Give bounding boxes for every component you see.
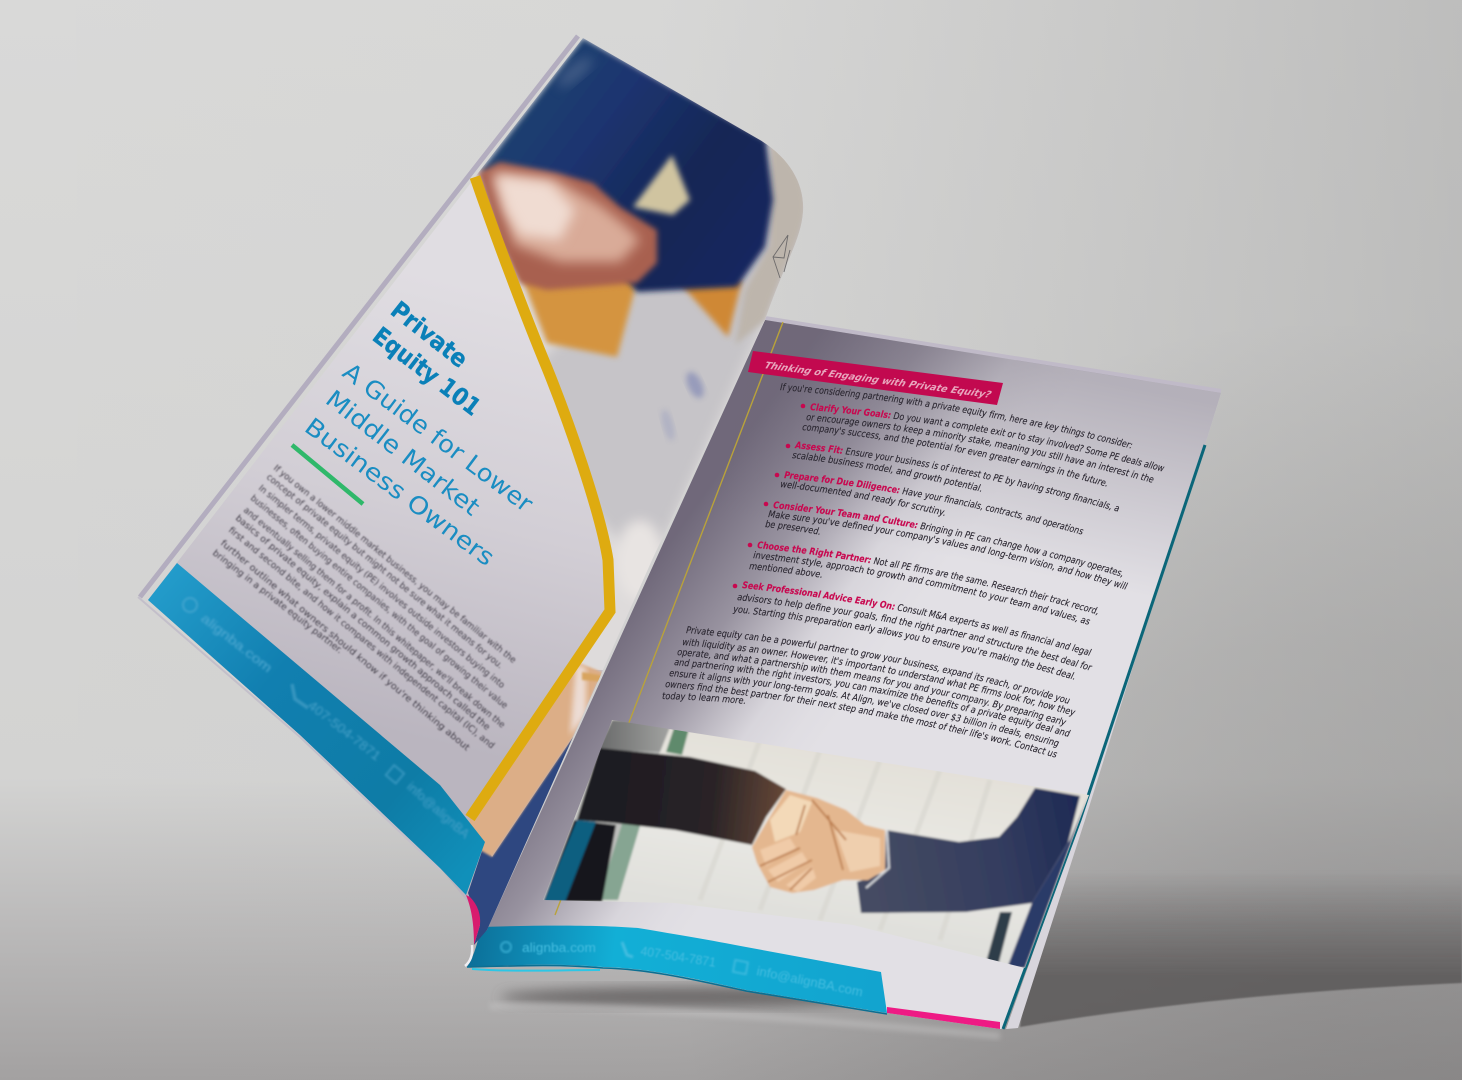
- top page stack lip: [765, 318, 1221, 391]
- right page footer band: [467, 926, 887, 1014]
- right page edge: [1003, 445, 1205, 1029]
- intro body text: If you own a lower middle market business, you may be familiar with the: [271, 464, 518, 666]
- section heading: Thinking of Engaging with Private Equity?: [761, 361, 994, 400]
- top shading on right page: [700, 320, 1221, 610]
- icon: phone: [292, 684, 308, 708]
- back page sliver: [1006, 612, 1150, 1029]
- title: Middle Market: [320, 385, 485, 521]
- title: A Guide for Lower: [337, 357, 538, 518]
- bullet list: Prepare for Due Diligence: Have your financials, contracts, and operations: [784, 471, 1084, 534]
- icon: globe: [501, 942, 511, 952]
- intro line: If you're considering partnering with a private equity firm, here are key things to consider:: [780, 383, 1132, 448]
- closing paragraph: ensure it aligns with your long-term goals. At Align, we've closed over $3 billion in deals, ensuring: [670, 671, 1060, 748]
- right page: [467, 316, 1221, 1030]
- intro body text: and eventually selling them for a profit. In this whitepaper, we'll break down the: [241, 506, 507, 731]
- bullet list: Seek Professional Advice Early On: Consult M&A experts as well as financial and legal: [742, 581, 1092, 656]
- thin yellow page rule: [555, 322, 783, 915]
- outer page stack lip: [140, 36, 578, 597]
- email: info@alignBA: [404, 779, 473, 842]
- title: Business Owners: [299, 412, 500, 572]
- intro body text: first and second bite, and how it compares with independent capital (IC), and: [226, 526, 496, 751]
- spine shading on right page: [467, 320, 1221, 1029]
- bullet list: [732, 403, 1164, 680]
- phone number: 407-504-7871: [305, 698, 384, 764]
- bullet list: or encourage owners to keep a minority stake, meaning you still have an interest in the: [806, 415, 1154, 482]
- intro body text: further outline what owners should know if you're thinking about: [218, 539, 472, 754]
- closing paragraph: with liquidity as an owner. However, it's important to understand what PE firms look for, how they: [682, 638, 1076, 717]
- white curl edge: [465, 945, 472, 966]
- page sheet: [467, 320, 1221, 1029]
- bullet list: scalable business model, and growth potential.: [792, 452, 982, 492]
- closing paragraph: operate, and what a partnership with them means for you and your company. By preparing early: [678, 650, 1066, 726]
- bullet list: you. Starting this preparation early allows you to ensure you're making the best deal.: [732, 606, 1074, 680]
- small logo on page corner: [773, 235, 790, 278]
- title: Equity 101: [367, 322, 486, 422]
- bullet list: company's success, and the potential for even greater earnings in the future.: [802, 425, 1107, 486]
- left page footer band: [148, 563, 485, 895]
- bullet list: Make sure you've defined your company's values and long-term vision, and how they will: [768, 510, 1128, 590]
- icon: phone: [622, 942, 633, 957]
- ground shadow right of brochure: [1020, 870, 1462, 1027]
- icon: globe: [183, 598, 197, 612]
- bullet list: Choose the Right Partner: Not all PE firms are the same. Research their track record,: [758, 541, 1098, 616]
- title: [299, 296, 538, 572]
- intro body text: concept of private equity but might not be sure what it means for you.: [264, 473, 504, 671]
- intro body text: In simpler terms, private equity (PE) involves outside investors buying into: [256, 484, 507, 691]
- email: info@alignBA.com: [755, 963, 864, 999]
- website: alignba.com: [198, 611, 275, 675]
- page sheet: [148, 38, 803, 943]
- yellow curved band: [470, 177, 610, 818]
- left page: [138, 30, 820, 966]
- title: Private: [385, 296, 473, 373]
- intro body text: basics of private equity, explain a common growth approach called the: [233, 514, 492, 733]
- intro body text: businesses, often buying entire companies, with the goal of growing their value: [248, 494, 509, 711]
- icon: mail: [733, 960, 748, 974]
- closing paragraph: today to learn more.: [662, 692, 745, 704]
- bullet list: Assess Fit: Ensure your business is of interest to PE by having strong financials, a: [794, 442, 1120, 512]
- bullet list: Consider Your Team and Culture: Bringing in PE can change how a company operates,: [774, 501, 1122, 578]
- section heading: [748, 351, 1003, 405]
- pink crescent on curl: [466, 895, 480, 945]
- intro body text: bringing in a private equity partner.: [210, 548, 344, 656]
- navy strip along spine: [468, 737, 573, 945]
- closing paragraph: owners find the best partner for their next step and make the most of their life's work. Contact us: [666, 682, 1058, 758]
- bullet list: well-documented and ready for scrutiny.: [781, 481, 945, 517]
- icon: mail: [386, 765, 404, 783]
- phone number: 407-504-7871: [640, 943, 717, 970]
- bullet list: investment style, approach to growth and commitment to your team and values, as: [753, 551, 1090, 624]
- website: alignba.com: [522, 940, 596, 955]
- bullet list: advisors to help define your goals, find the right partner and structure the best deal for: [737, 594, 1092, 670]
- closing paragraph: [662, 626, 1076, 758]
- bullet list: be preserved.: [765, 520, 820, 535]
- bullet list: mentioned above.: [749, 564, 822, 578]
- green accent bar: [292, 445, 363, 504]
- lower page edge: [138, 597, 440, 870]
- photo: handshake: [543, 720, 1089, 968]
- bullet list: Clarify Your Goals: Do you want a complete exit or to stay involved? Some PE deals allow: [810, 403, 1164, 472]
- pink corner strip: [887, 1007, 1000, 1029]
- ground shadow under brochure: [490, 987, 1000, 1036]
- closing paragraph: and partnering with the right investors, you can maximize the benefits of a private equity deal and: [674, 659, 1071, 737]
- closing paragraph: Private equity can be a powerful partner to grow your business, expand its reach, or provide you: [686, 626, 1070, 704]
- photo: clasped hands: [460, 30, 820, 857]
